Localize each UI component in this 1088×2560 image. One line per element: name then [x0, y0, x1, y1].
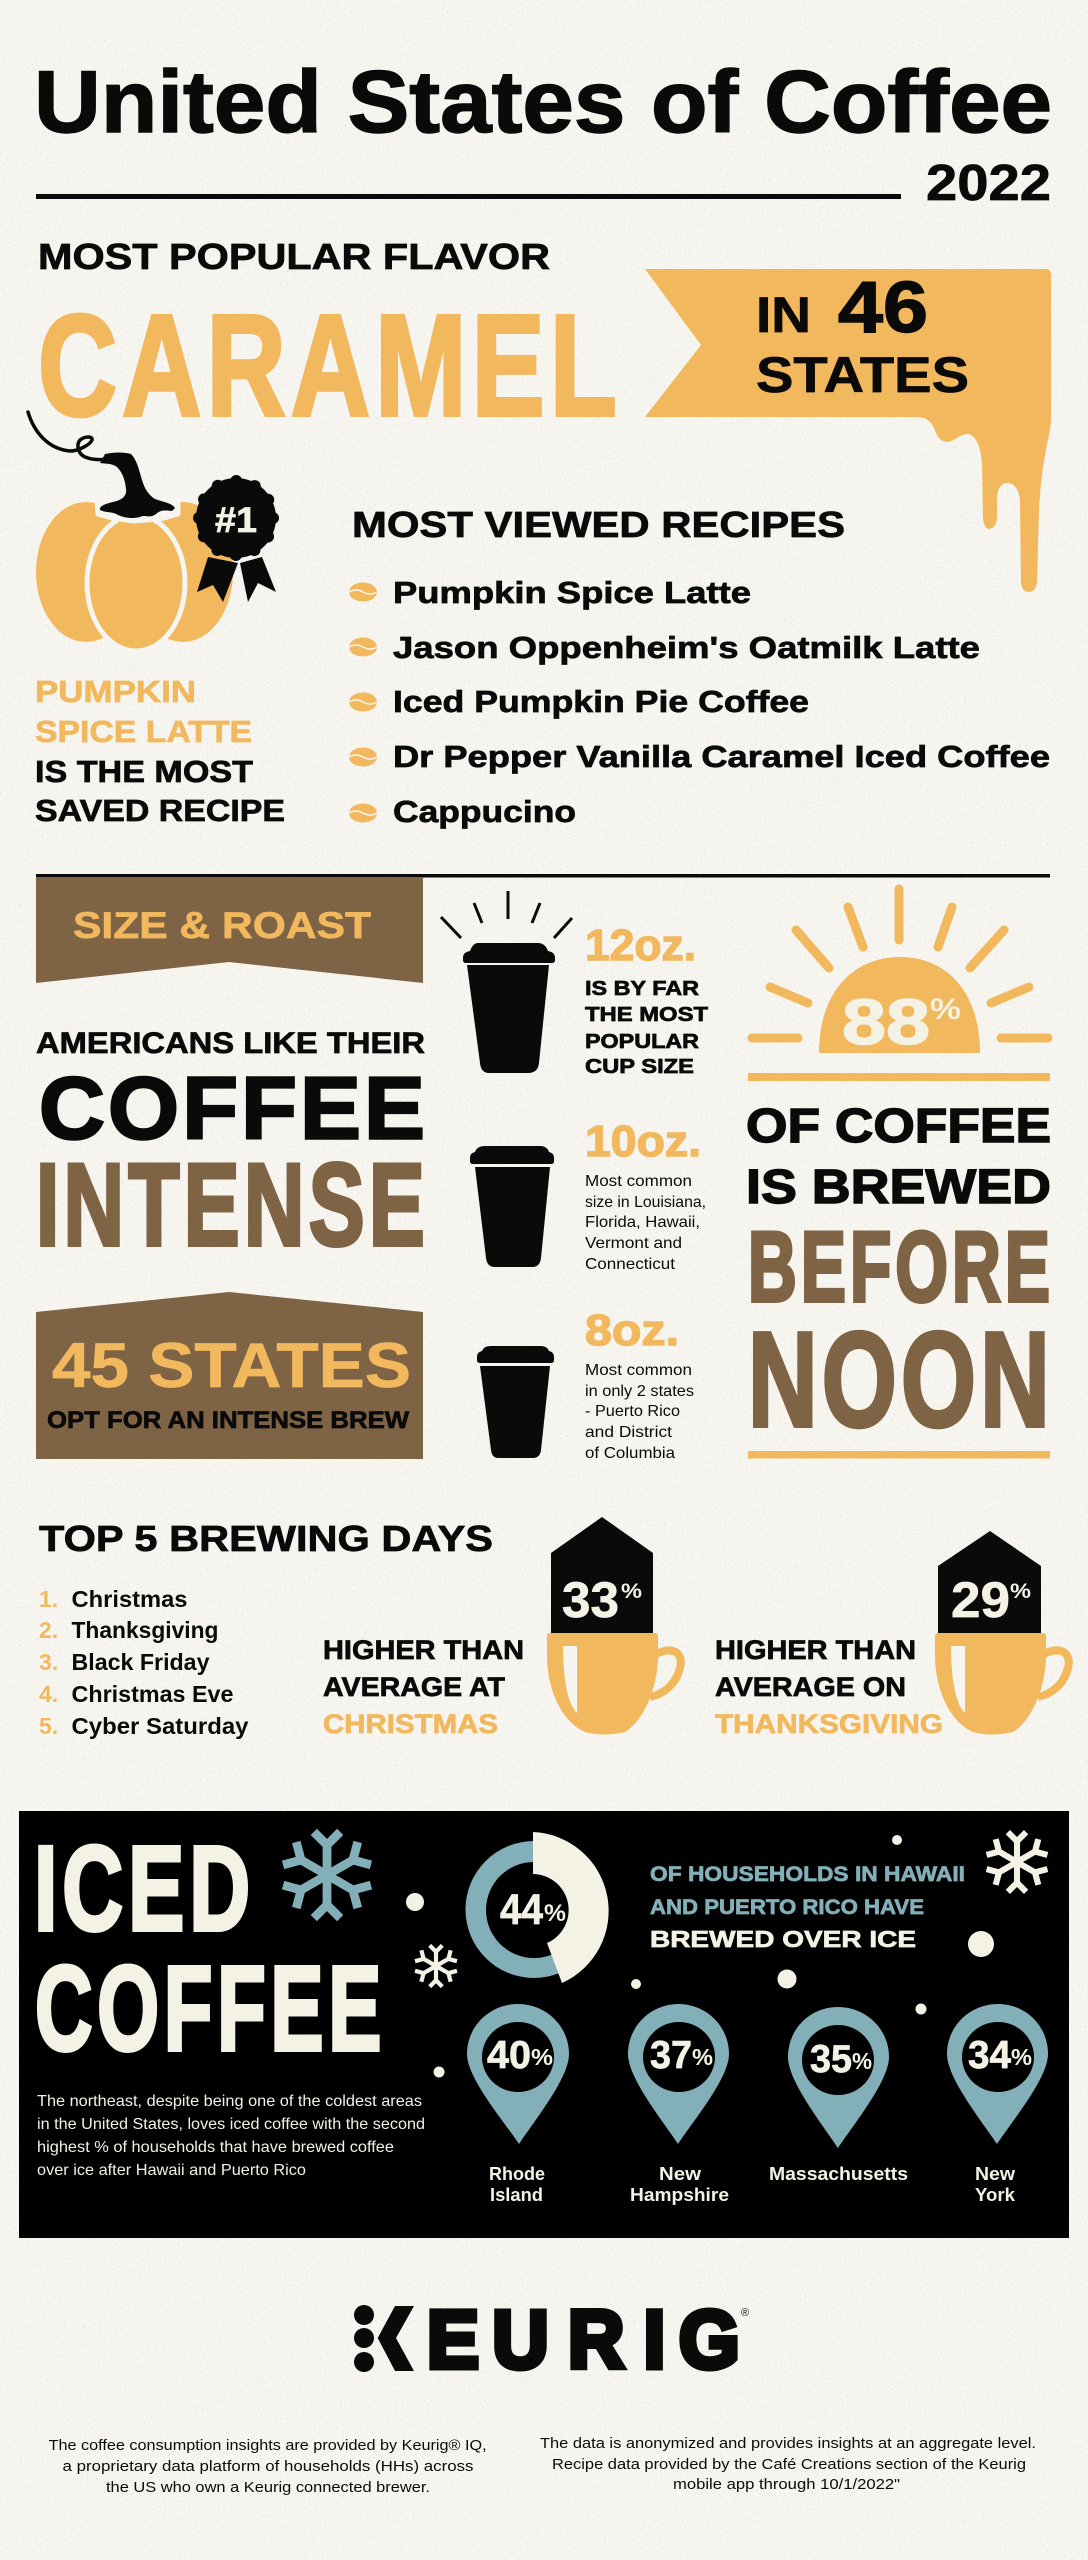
- donut chart: 44%: [466, 1832, 609, 1983]
- icon: mug 33%: %: [621, 1580, 642, 1603]
- 10oz text: Vermont and: [585, 1235, 682, 1252]
- text: higher than average on thanksgiving: THANKSGIVING: [715, 1709, 943, 1739]
- icon: #1 rosette: #1: [215, 501, 257, 540]
- text: households brewed over ice: OF HOUSEHOLDS IN HAWAII: [650, 1863, 965, 1886]
- pin: new hampshire 37%: 37: [650, 2034, 692, 2077]
- 10oz text: Most common: [585, 1173, 692, 1190]
- pin: rhode island 40%: Rhode: [489, 2164, 545, 2184]
- pin: new hampshire 37%: %: [692, 2044, 713, 2070]
- 10oz text: Connecticut: [585, 1256, 676, 1273]
- icon: 10oz cup: [470, 1146, 554, 1267]
- text: of coffee is brewed: [746, 1100, 1051, 1214]
- 10oz text: 10oz.: [585, 1117, 701, 1166]
- list: brewing days: [39, 1586, 249, 1739]
- text: pumpkin spice latte most saved: IS THE MOST: [35, 754, 253, 789]
- text: pumpkin spice latte most saved: SAVED RECIPE: [35, 793, 285, 828]
- list: brewing days: Christmas Eve: [72, 1681, 234, 1707]
- banner: size and roast: SIZE & ROAST: [73, 905, 371, 946]
- pin: rhode island 40%: Island: [490, 2185, 543, 2205]
- pin: new hampshire 37%: [628, 2004, 729, 2205]
- footnote: right: Recipe data provided by the Café Creations section of the Keurig: [552, 2456, 1026, 2473]
- 8oz text: - Puerto Rico: [585, 1403, 680, 1420]
- recipe 1: Pumpkin Spice Latte: [393, 575, 751, 610]
- icon: large teal snowflake: [283, 1832, 371, 1918]
- icon: #1 rosette: [196, 478, 276, 602]
- list: brewing days: 4.: [39, 1681, 58, 1707]
- pin: rhode island 40%: 40: [487, 2034, 531, 2077]
- 8oz text: Most common: [585, 1362, 692, 1379]
- icon: mug 33%: 33: [562, 1572, 619, 1628]
- text: higher than average on thanksgiving: AVERAGE ON: [715, 1672, 906, 1702]
- 8oz text: [585, 1306, 694, 1462]
- 8oz text: and District: [585, 1424, 673, 1441]
- paragraph: northeast: [37, 2093, 425, 2179]
- icon: top right snowflake: [987, 1832, 1047, 1892]
- heading: most viewed recipes: MOST VIEWED RECIPES: [352, 504, 845, 545]
- pin: massachusetts 35%: 35: [810, 2038, 852, 2081]
- banner text: in 46 states: STATES: [756, 347, 969, 403]
- text: pumpkin spice latte most saved: [35, 674, 285, 828]
- 12oz text: 12oz.: [585, 921, 696, 970]
- pin: massachusetts 35%: Massachusetts: [769, 2164, 908, 2184]
- logo: keurig: ®: [741, 2307, 749, 2319]
- banner text: in 46 states: 46: [838, 268, 928, 348]
- banner text: in 46 states: [756, 268, 969, 403]
- footnote: right: mobile app through 10/1/2022": [673, 2476, 900, 2493]
- caramel dripping banner: [645, 268, 1051, 592]
- heading: coffee: COFFEE: [35, 1940, 386, 2076]
- list: brewing days: 1.: [39, 1586, 58, 1612]
- heading: most popular flavor: MOST POPULAR FLAVOR: [38, 236, 550, 277]
- footnote: left: The coffee consumption insights are provided by Keurig® IQ,: [49, 2437, 487, 2454]
- pin: new hampshire 37%: Hampshire: [630, 2185, 729, 2205]
- recipe 2: Jason Oppenheim's Oatmilk Latte: [393, 630, 980, 665]
- text: pumpkin spice latte most saved: PUMPKIN: [35, 674, 196, 709]
- panel: iced coffee: [19, 1811, 1069, 2238]
- text: higher than average on thanksgiving: [715, 1635, 943, 1739]
- icon: sun 88%: [752, 889, 1048, 1058]
- icon: sun 88%: 88: [842, 986, 930, 1058]
- callout: 45 states: 45 STATES: [52, 1331, 411, 1401]
- heading: iced: ICED: [34, 1820, 255, 1956]
- paragraph: northeast: highest % of households that have brewed coffee: [37, 2139, 394, 2156]
- list: brewing days: 5.: [39, 1713, 58, 1739]
- footnote: left: [49, 2437, 487, 2496]
- list: brewing days: Cyber Saturday: [72, 1713, 249, 1739]
- pin: new york 34%: York: [975, 2185, 1016, 2205]
- 12oz text: POPULAR: [585, 1031, 700, 1053]
- icon: 8oz cup: [477, 1346, 554, 1458]
- pin: new york 34%: %: [1011, 2044, 1032, 2070]
- text: pumpkin spice latte most saved: SPICE LATTE: [35, 714, 252, 749]
- footnote: right: [540, 2435, 1036, 2493]
- text: higher than average at christmas: [323, 1635, 524, 1739]
- pin: massachusetts 35%: %: [852, 2048, 872, 2074]
- icon: mug 29%: [935, 1531, 1069, 1734]
- callout: 45 states: [36, 1292, 423, 1459]
- icon: mug 33%: [547, 1517, 681, 1734]
- pin: new york 34%: New: [975, 2164, 1016, 2184]
- icon: 12oz cup with rays: [441, 891, 572, 1073]
- heading: top 5 brewing days: TOP 5 BREWING DAYS: [39, 1518, 493, 1559]
- footnote: left: the US who own a Keurig connected brewer.: [106, 2479, 430, 2496]
- 10oz text: [585, 1117, 706, 1273]
- recipe 5: Cappucino: [393, 794, 576, 829]
- text: intense: INTENSE: [36, 1139, 429, 1270]
- text: higher than average on thanksgiving: HIGHER THAN: [715, 1635, 916, 1665]
- title rule and year: 2022: [926, 154, 1051, 211]
- list: brewing days: 3.: [39, 1649, 58, 1675]
- title: United States of Coffee: [34, 52, 1052, 151]
- text: households brewed over ice: [650, 1863, 965, 1952]
- icon: mug 29%: %: [1010, 1580, 1031, 1603]
- snow dots: [406, 1835, 994, 2078]
- footnote: left: a proprietary data platform of households (HHs) across: [62, 2458, 474, 2475]
- text: higher than average at christmas: HIGHER THAN: [323, 1635, 524, 1665]
- text: coffee: COFFEE: [39, 1058, 428, 1158]
- pin: new york 34%: 34: [968, 2034, 1011, 2077]
- pin: new hampshire 37%: New: [659, 2164, 702, 2184]
- text: americans like their: AMERICANS LIKE THEIR: [36, 1027, 425, 1060]
- text: of coffee is brewed: IS BREWED: [746, 1161, 1051, 1214]
- pin: new york 34%: [947, 2004, 1048, 2205]
- text: higher than average at christmas: AVERAGE AT: [323, 1672, 506, 1702]
- banner: size and roast: [36, 877, 423, 983]
- text: of coffee is brewed: OF COFFEE: [746, 1100, 1051, 1153]
- text: households brewed over ice: BREWED OVER ICE: [650, 1926, 916, 1952]
- callout: 45 states: OPT FOR AN INTENSE BREW: [47, 1407, 409, 1434]
- recipe 4: Dr Pepper Vanilla Caramel Iced Coffee: [393, 739, 1050, 774]
- 12oz text: IS BY FAR: [585, 978, 700, 1000]
- text: households brewed over ice: AND PUERTO RICO HAVE: [650, 1896, 924, 1919]
- text: higher than average at christmas: CHRISTMAS: [323, 1709, 498, 1739]
- 10oz text: size in Louisiana,: [585, 1194, 706, 1211]
- icon: pumpkin: [28, 412, 276, 651]
- 10oz text: Florida, Hawaii,: [585, 1214, 700, 1231]
- list: brewing days: Black Friday: [72, 1649, 210, 1675]
- pin: massachusetts 35%: [769, 2007, 908, 2184]
- paragraph: northeast: over ice after Hawaii and Puerto Rico: [37, 2162, 306, 2179]
- 12oz text: [585, 921, 708, 1078]
- 12oz text: CUP SIZE: [585, 1056, 694, 1078]
- pin: rhode island 40%: [467, 2004, 569, 2205]
- banner text: in 46 states: IN: [756, 287, 811, 343]
- icon: sun 88%: %: [930, 993, 961, 1026]
- list: brewing days: Thanksgiving: [72, 1617, 218, 1643]
- list: brewing days: 2.: [39, 1617, 58, 1643]
- recipe 3: Iced Pumpkin Pie Coffee: [393, 684, 809, 719]
- footnote: right: The data is anonymized and provides insights at an aggregate level.: [540, 2435, 1036, 2452]
- title rule and year: [36, 154, 1051, 211]
- list: brewing days: Christmas: [72, 1586, 188, 1612]
- pin: rhode island 40%: %: [531, 2044, 553, 2070]
- icon: small snowflake: [415, 1945, 457, 1987]
- 8oz text: in only 2 states: [585, 1383, 694, 1400]
- 12oz text: THE MOST: [585, 1004, 708, 1026]
- recipes list: [349, 575, 1050, 829]
- text: before noon: [748, 1211, 1054, 1455]
- icon: mug 29%: 29: [951, 1572, 1010, 1628]
- 8oz text: of Columbia: [585, 1445, 675, 1462]
- donut chart: 44%: 44: [500, 1886, 543, 1934]
- paragraph: northeast: in the United States, loves iced coffee with the second: [37, 2116, 425, 2133]
- paragraph: northeast: The northeast, despite being one of the coldest areas: [37, 2093, 422, 2110]
- donut chart: 44%: %: [544, 1900, 566, 1927]
- 8oz text: 8oz.: [585, 1306, 679, 1355]
- caramel word: CARAMEL: [38, 285, 622, 446]
